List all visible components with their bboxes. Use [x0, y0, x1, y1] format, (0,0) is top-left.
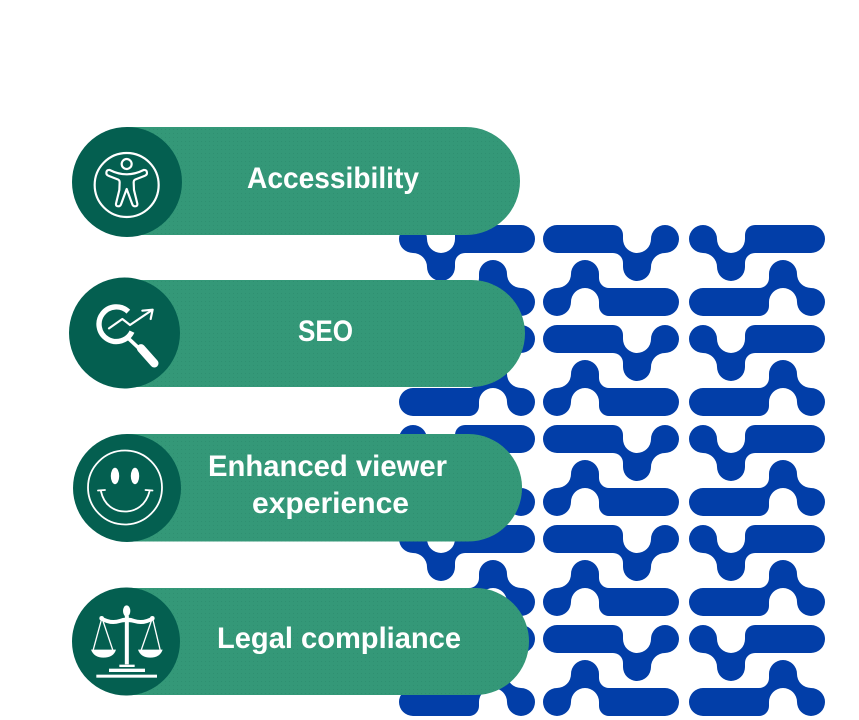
- label: Enhanced viewer experience: [208, 450, 447, 520]
- icon disc: accessibility: [72, 127, 182, 237]
- pill: enhanced viewer experience: [127, 434, 522, 542]
- icon disc: legal compliance: [72, 588, 180, 696]
- icon: accessibility figure: [95, 153, 159, 217]
- icon: magnifier with growth arrow: [99, 307, 154, 363]
- icon disc: SEO: [69, 278, 180, 388]
- label: SEO: SEO: [298, 315, 353, 348]
- panel: accessibility: [72, 127, 520, 237]
- label: Legal compliance: Legal compliance: [217, 622, 461, 655]
- blue interlocking pattern: [399, 225, 825, 716]
- icon: scales of justice: [91, 605, 163, 678]
- panel: SEO: [69, 278, 525, 388]
- label: Accessibility: Accessibility: [247, 162, 419, 195]
- icon disc: enhanced viewer experience: [73, 434, 181, 542]
- panel: legal compliance: [72, 588, 529, 696]
- pill: legal compliance: [126, 588, 529, 695]
- label: Enhanced viewer experience: experience: [252, 487, 409, 520]
- panel: enhanced viewer experience: [73, 434, 522, 542]
- icon: smiley face: [88, 450, 162, 524]
- label: Enhanced viewer experience: Enhanced viewer: [208, 450, 447, 483]
- pill: accessibility: [127, 127, 520, 235]
- pill: SEO: [124, 280, 525, 387]
